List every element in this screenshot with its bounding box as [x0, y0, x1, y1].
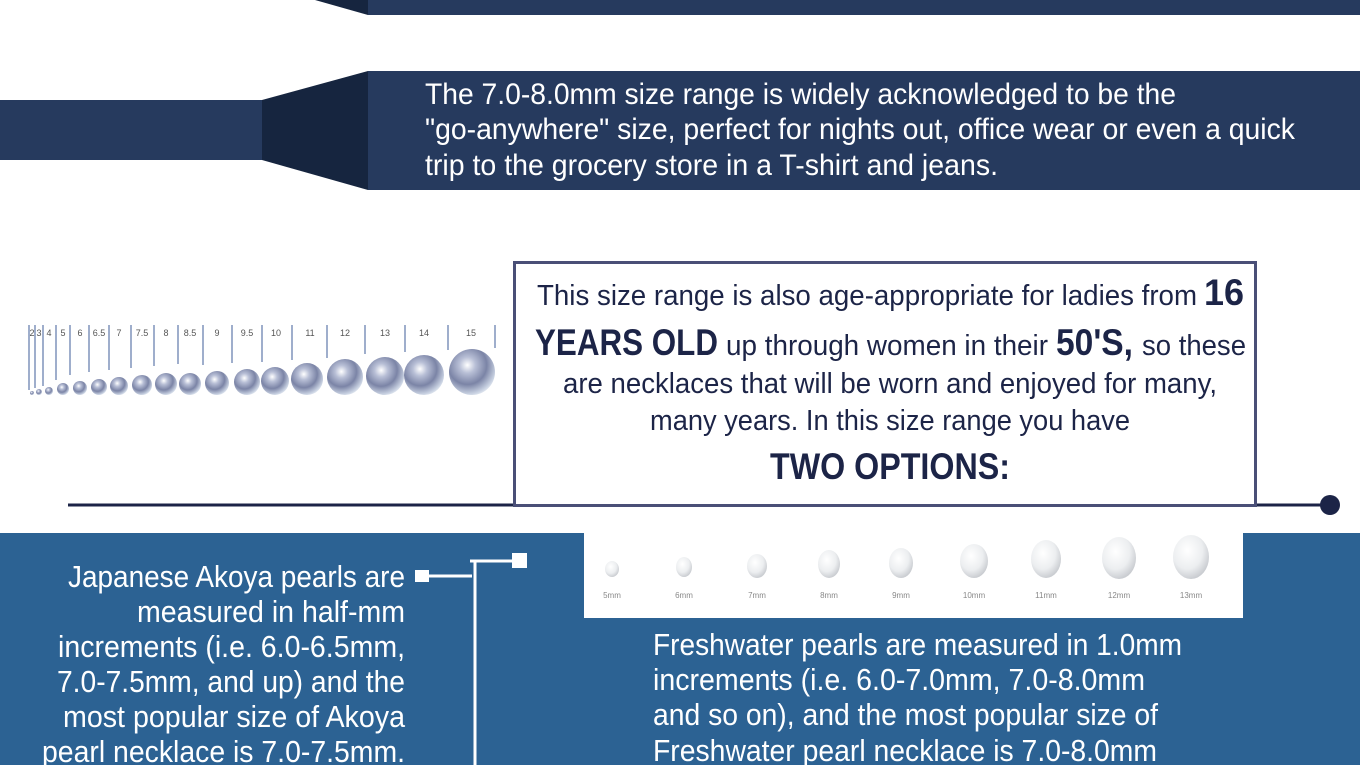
pearl size chart (2-15mm): 4 [46, 328, 52, 338]
freshwater pearl size image: 5mm [603, 591, 621, 600]
text: Freshwater pearls: increments (i.e. 6.0-7.0mm, 7.0-8.0mm [653, 662, 1145, 697]
pearl size chart (2-15mm): 9.5 [241, 328, 253, 338]
banner: go-anywhere size: The 7.0-8.0mm size range is widely acknowledged to be the [425, 78, 1176, 111]
text: Akoya pearls: Japanese Akoya pearls are [68, 559, 405, 594]
blue section background [0, 533, 1360, 765]
pearl size chart (2-15mm): 5 [60, 328, 66, 338]
pearl size chart (2-15mm): 2 [29, 328, 35, 338]
callout box: age-appropriate: TWO OPTIONS: [770, 446, 1010, 487]
pearl size chart (2-15mm): 15 [466, 328, 476, 338]
freshwater pearl size image: 9mm [892, 591, 910, 600]
pearl size chart (2-15mm): 10 [271, 328, 281, 338]
pearl size chart (2-15mm): 9 [214, 328, 220, 338]
freshwater pearl size image: 10mm [963, 591, 985, 600]
text: Freshwater pearls [653, 627, 1191, 765]
text: Akoya pearls: most popular size of Akoya [63, 699, 406, 734]
callout box: age-appropriate [514, 262, 1256, 506]
pearl size chart (2-15mm): 8 [163, 328, 169, 338]
pearl size chart (2-15mm): 6 [77, 328, 83, 338]
top banner [315, 0, 1360, 15]
freshwater pearl size image [584, 533, 1243, 618]
pearl size chart (2-15mm): 6.5 [93, 328, 105, 338]
pearl size chart (2-15mm): 3 [36, 328, 42, 338]
callout box: age-appropriate: so these [1142, 330, 1246, 362]
banner: go-anywhere size: "go-anywhere" size, perfect for nights out, office wear or even a quick [425, 113, 1296, 146]
text: Akoya pearls: increments (i.e. 6.0-6.5mm, [58, 629, 405, 664]
callout box: age-appropriate: This size range is also age-appropriate for ladies from [537, 280, 1197, 312]
text: Freshwater pearls: and so on), and the most popular size of [653, 697, 1158, 732]
text: Akoya pearls: measured in half-mm [137, 594, 405, 629]
banner: go-anywhere size: trip to the grocery store in a T-shirt and jeans. [425, 149, 998, 182]
divider line with dot [68, 495, 1340, 515]
connector lines [415, 553, 527, 765]
pearl size chart (2-15mm): 11 [305, 328, 315, 338]
freshwater pearl size image: 12mm [1108, 591, 1130, 600]
pearl size chart (2-15mm): 13 [380, 328, 390, 338]
text: Akoya pearls: 7.0-7.5mm, and up) and the [57, 664, 405, 699]
banner: go-anywhere size [0, 71, 1360, 190]
pearl size chart (2-15mm): 7.5 [136, 328, 148, 338]
callout box: age-appropriate: up through women in their [726, 330, 1048, 362]
callout box: age-appropriate: are necklaces that will be worn and enjoyed for many, [563, 368, 1217, 400]
callout box: age-appropriate: many years. In this size range you have [650, 405, 1130, 437]
freshwater pearl size image: 11mm [1035, 591, 1057, 600]
callout box: age-appropriate: YEARS OLD [535, 322, 718, 363]
freshwater pearl size image: 6mm [675, 591, 693, 600]
freshwater pearl size image: 7mm [748, 591, 766, 600]
text: Freshwater pearls: Freshwater pearls are measured in 1.0mm [653, 627, 1182, 662]
pearl size chart (2-15mm): 14 [419, 328, 429, 338]
pearl size chart (2-15mm): 8.5 [184, 328, 196, 338]
pearl size chart (2-15mm) [29, 325, 495, 395]
text: Akoya pearls [42, 559, 414, 765]
freshwater pearl size image: 8mm [820, 591, 838, 600]
callout box: age-appropriate: 50'S, [1056, 322, 1133, 363]
pearl size chart (2-15mm): 12 [340, 328, 350, 338]
freshwater pearl size image: 13mm [1180, 591, 1202, 600]
pearl size chart (2-15mm): 7 [116, 328, 122, 338]
callout box: age-appropriate: 16 [1204, 272, 1244, 313]
